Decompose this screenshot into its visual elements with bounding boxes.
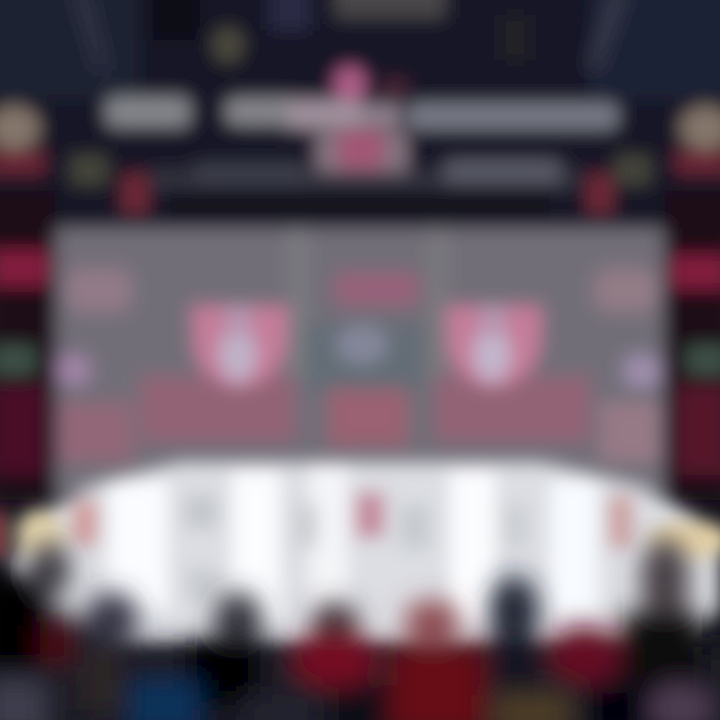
shield logo left [192, 306, 288, 388]
jumbotron wall [56, 228, 664, 498]
banner: wordmark and crest [106, 66, 618, 182]
arena ceiling [0, 0, 720, 230]
ice rink [0, 462, 720, 650]
shield logo right [446, 306, 542, 388]
spectators foreground [0, 538, 720, 720]
side decorations [0, 106, 720, 500]
